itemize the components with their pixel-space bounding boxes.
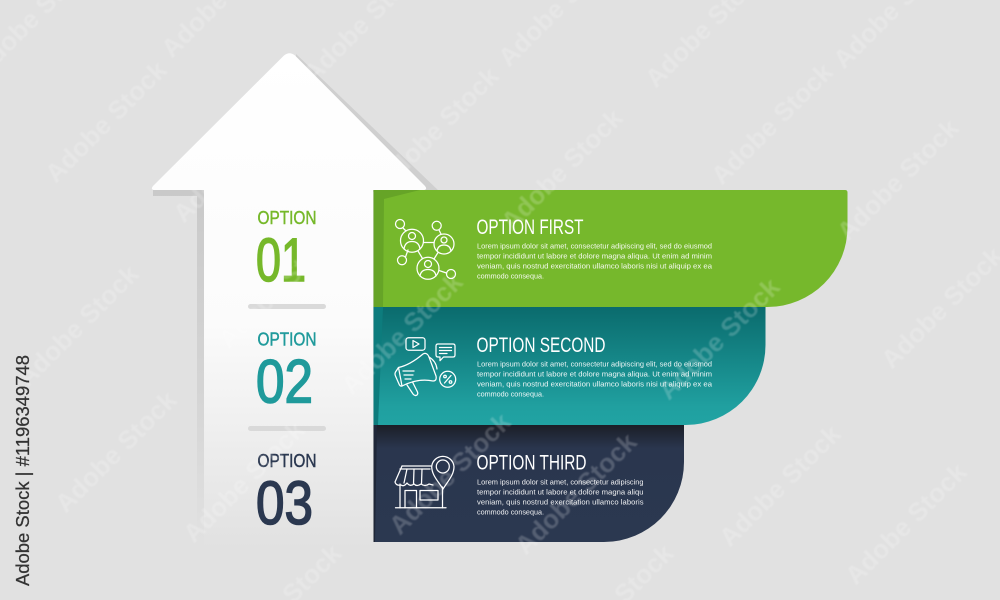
arrow shadow bbox=[153, 54, 440, 545]
title: option third: OPTION THIRD bbox=[476, 452, 586, 474]
stock watermarks: Adobe Stock bbox=[713, 418, 847, 552]
panel: option third bbox=[374, 425, 684, 542]
white up arrow bbox=[152, 53, 426, 548]
icon: connected people network bbox=[396, 220, 456, 279]
stock watermarks: Adobe Stock bbox=[831, 112, 965, 246]
panel: option first bbox=[374, 190, 848, 307]
stock watermarks: Adobe Stock bbox=[49, 384, 183, 518]
text block: option second: Lorem ipsum dolor sit amet, consectetur adipiscing elit, sed do eiusmod bbox=[477, 360, 712, 368]
stock watermarks: Adobe Stock bbox=[39, 54, 173, 188]
stock watermarks: Adobe Stock bbox=[705, 56, 839, 190]
text block: option first: Lorem ipsum dolor sit amet, consectetur adipiscing elit, sed do eiusmod bbox=[477, 242, 712, 250]
vertical stock id caption: Adobe Stock | #1196349748 bbox=[13, 355, 33, 586]
text block: option third: tempor incididunt ut labore et dolore magna aliqu bbox=[477, 488, 644, 496]
option 01 label: OPTION bbox=[258, 208, 316, 228]
stock watermarks: Adobe Stock bbox=[495, 102, 629, 236]
stock watermarks: Adobe Stock bbox=[652, 271, 786, 405]
text block: option second: tempor incididunt ut labore et dolore magna aliqua. Ut enim ad minim bbox=[477, 370, 712, 378]
stock watermarks: Adobe Stock bbox=[839, 456, 973, 590]
stock watermarks: Adobe Stock bbox=[11, 258, 145, 392]
stock watermarks: Adobe Stock bbox=[335, 266, 469, 400]
text block: option second bbox=[477, 360, 713, 398]
option 01 label: 01 bbox=[256, 226, 306, 294]
text block: option third bbox=[477, 478, 644, 516]
text block: option third: Lorem ipsum dolor sit amet, consectetur adipiscing bbox=[477, 478, 644, 486]
stock watermarks: Adobe Stock bbox=[371, 60, 505, 194]
text block: option first: tempor incididunt ut labore et dolore magna aliqua. Ut enim ad minim bbox=[477, 252, 712, 260]
text block: option third: veniam, quis nostrud exercitation ullamco laboris bbox=[477, 498, 644, 506]
icon: store with location pin bbox=[395, 456, 454, 508]
stock watermarks: Adobe Stock bbox=[509, 426, 643, 560]
title: option second: OPTION SECOND bbox=[476, 334, 606, 357]
stock watermarks: Adobe Stock bbox=[383, 406, 517, 540]
icon: megaphone with video, chat and percent bbox=[395, 338, 456, 396]
text block: option second: commodo consequa. bbox=[477, 390, 544, 398]
text block: option first bbox=[477, 242, 713, 280]
option 02 label: 02 bbox=[256, 348, 313, 416]
title: option first: OPTION FIRST bbox=[476, 216, 584, 239]
text block: option first: veniam, quis nostrud exercitation ullamco laboris nisi ut aliquip ex ea bbox=[477, 262, 713, 270]
stock watermarks: Adobe Stock bbox=[177, 414, 311, 548]
text block: option second: veniam, quis nostrud exercitation ullamco laboris nisi ut aliquip ex ea bbox=[477, 380, 713, 388]
divider 1 bbox=[248, 304, 326, 309]
stock watermarks: Adobe Stock bbox=[212, 220, 346, 354]
divider 2 bbox=[248, 426, 326, 431]
option 03 label: 03 bbox=[256, 469, 313, 537]
text block: option third: commodo consequa. bbox=[477, 508, 544, 516]
option 02 label: OPTION bbox=[258, 330, 316, 350]
panel: option second bbox=[374, 307, 766, 425]
option 03 label: OPTION bbox=[258, 451, 316, 471]
stock watermarks: Adobe Stock bbox=[167, 94, 301, 228]
text block: option first: commodo consequa. bbox=[477, 272, 544, 280]
